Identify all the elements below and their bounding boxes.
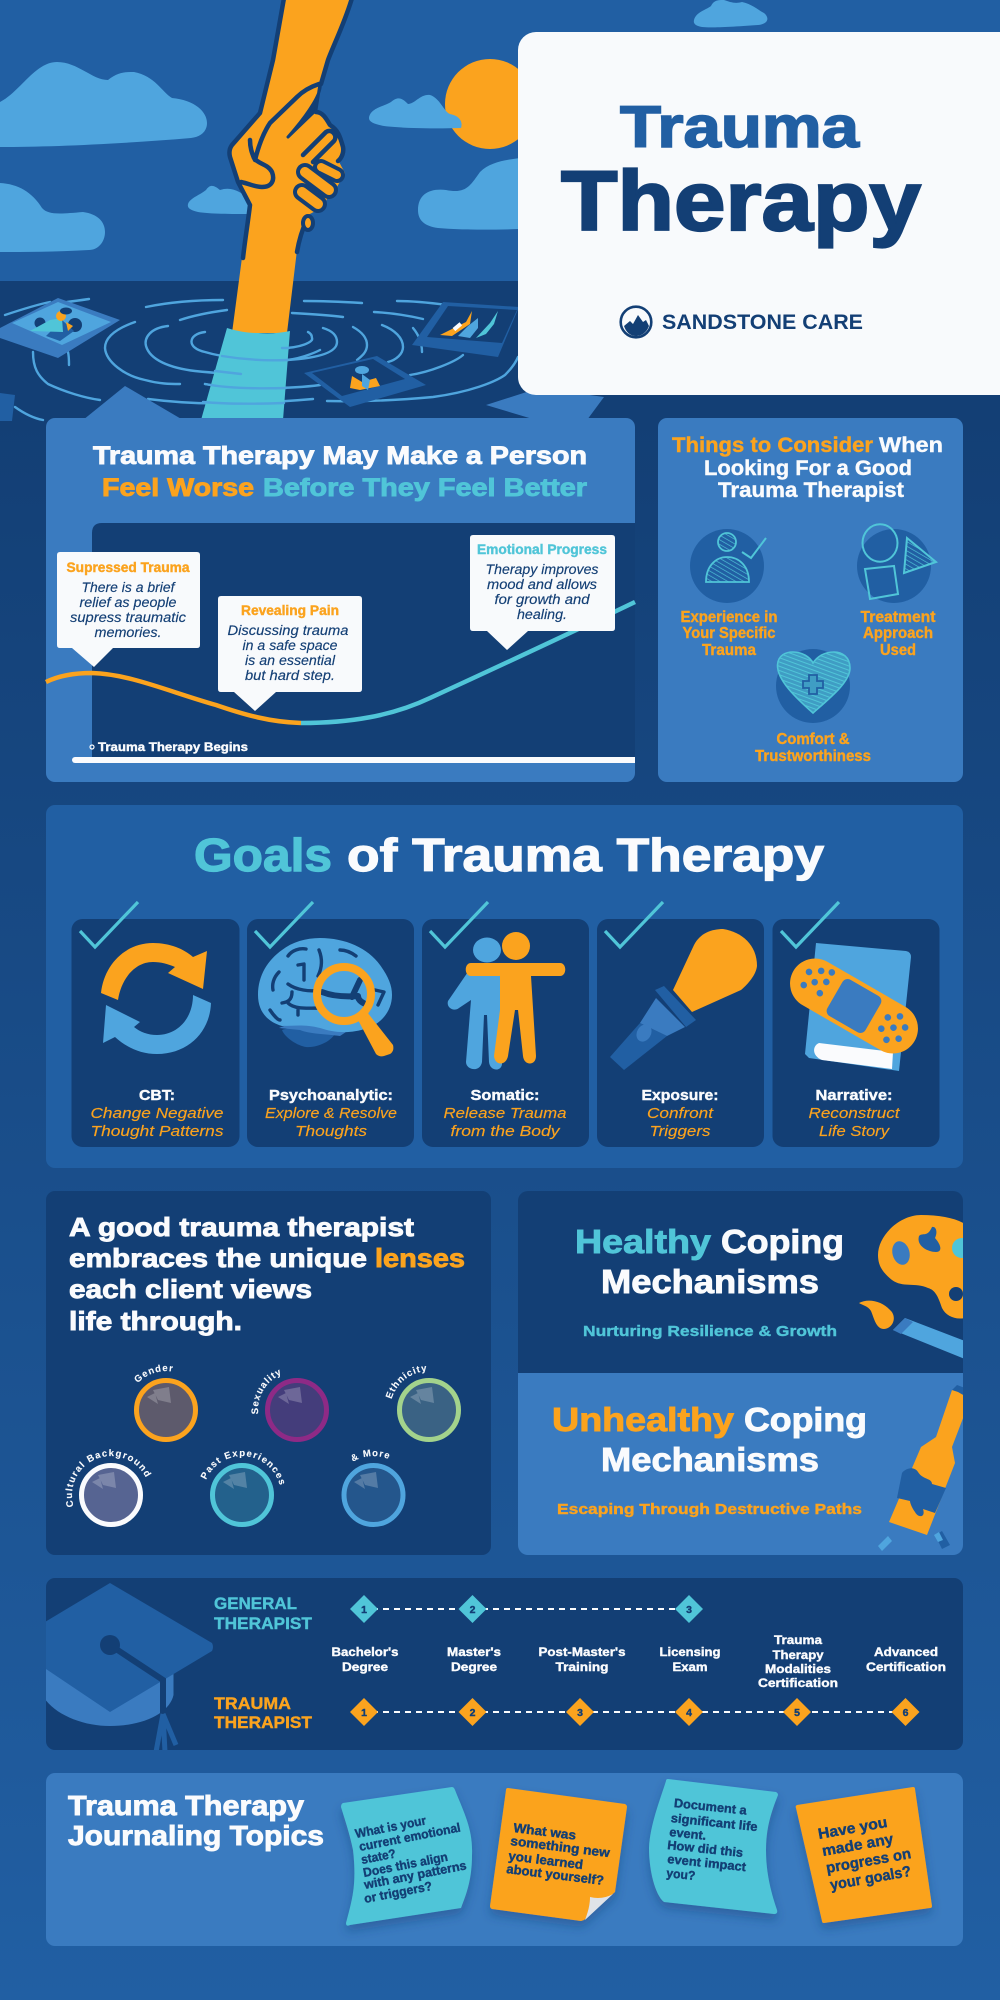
icon: treatment approach [857, 524, 936, 603]
panel: coping mechanisms [518, 1191, 972, 1555]
unhealthy coping: Escaping Through Destructive Paths [557, 1501, 862, 1518]
healthy coping: Healthy [575, 1223, 712, 1260]
note: significant event: significant life [670, 1811, 758, 1834]
general therapist label [214, 1594, 313, 1633]
therapy start label: Trauma Therapy Begins [98, 740, 248, 754]
title card [518, 32, 1000, 395]
lenses statement: lenses [375, 1243, 465, 1273]
callout: revealing pain: Revealing Pain [241, 603, 339, 618]
goal card: psychoanalytic: Thoughts [295, 1123, 368, 1140]
hero illustration [0, 0, 1000, 421]
lenses statement: each client views [69, 1274, 312, 1304]
title: Trauma: Trauma [620, 95, 860, 160]
goal card: somatic: from the Body [450, 1123, 561, 1140]
goal card: CBT [72, 902, 240, 1147]
note: emotional state: or triggers? [363, 1879, 433, 1906]
credential labels: Exam [672, 1660, 708, 1674]
note: emotional state: state? [360, 1847, 397, 1867]
credential labels: Degree [342, 1660, 388, 1674]
icon: comfort heart [776, 649, 850, 723]
general path steps [350, 1595, 703, 1623]
icon: palette and brush [859, 1215, 972, 1359]
note: significant event: you? [666, 1866, 696, 1883]
goal card: somatic: Somatic: [470, 1088, 540, 1104]
unhealthy coping [518, 1373, 965, 1555]
lens: ethnicity [386, 1366, 461, 1442]
lens: past experiences [200, 1450, 284, 1527]
logo: SANDSTONE CARE [662, 311, 863, 334]
unhealthy coping: Mechanisms [601, 1441, 819, 1478]
ripples [5, 299, 518, 420]
label: treatment: Treatment [860, 609, 936, 626]
healthy coping: Mechanisms [601, 1263, 819, 1300]
label: comfort: Trustworthiness [755, 748, 871, 765]
title: Therapy: Therapy [561, 154, 921, 248]
trauma therapist label: TRAUMA [214, 1694, 291, 1713]
callout: revealing pain: but hard step. [245, 668, 335, 683]
label: experience: Trauma [702, 642, 756, 659]
goal card: exposure [597, 902, 764, 1147]
heading [194, 829, 824, 881]
lens: sexuality: Sexuality [251, 1370, 280, 1414]
trauma path steps: 5 [794, 1707, 800, 1719]
healthy coping [518, 1191, 972, 1373]
callout: suppressed trauma [57, 552, 200, 667]
note: significant event: Document a [673, 1796, 748, 1818]
credential labels: Certification [758, 1676, 838, 1690]
heading: Trauma Therapist [718, 479, 904, 502]
panel: things to consider [658, 418, 963, 782]
note: emotional state: with any patterns [362, 1858, 468, 1892]
note: emotional state: Does this align [362, 1850, 449, 1880]
icon: experience [690, 529, 766, 603]
goal card: somatic: Release Trauma [444, 1105, 566, 1122]
lens: past experiences: Past Experiences [200, 1450, 284, 1485]
goal card: exposure: Triggers [650, 1123, 711, 1140]
icon: graduation cap [40, 1583, 213, 1752]
note: progress on goals: Have you [817, 1814, 889, 1843]
note: something new: about yourself? [506, 1861, 605, 1888]
note: progress on goals [796, 1787, 932, 1923]
goal card: somatic [422, 902, 589, 1147]
lenses statement [69, 1212, 465, 1336]
panel: therapist education [40, 1578, 963, 1752]
note: significant event: event impact [667, 1852, 748, 1874]
general path steps: 3 [686, 1604, 692, 1616]
heading [68, 1790, 324, 1851]
label: experience: Your Specific [682, 625, 776, 642]
callout: suppressed trauma: memories. [94, 625, 162, 640]
note: progress on goals: made any [821, 1831, 895, 1860]
label: comfort: Comfort & [776, 731, 850, 748]
heading: Feel Worse [102, 474, 254, 502]
goal card: CBT: Thought Patterns [90, 1123, 224, 1140]
goal card: psychoanalytic: Psychoanalytic: [269, 1088, 393, 1104]
callout: suppressed trauma: There is a brief [82, 580, 176, 595]
lens: gender: Gender [134, 1364, 173, 1382]
trauma path steps: 1 [361, 1707, 367, 1719]
note: emotional state: What is your [354, 1813, 427, 1841]
ripples over sleeve [203, 348, 289, 404]
goal card: narrative: Narrative: [816, 1088, 892, 1104]
credential labels: Training [556, 1660, 608, 1674]
note: something new [490, 1788, 627, 1921]
callout: emotional progress: mood and allows [487, 577, 597, 592]
callout: emotional progress: Emotional Progress [477, 542, 607, 557]
goal card: CBT: CBT: [139, 1088, 175, 1104]
label: experience: Experience in [680, 609, 778, 626]
lenses statement: embraces the unique [69, 1243, 367, 1273]
trauma path steps: 4 [686, 1707, 692, 1719]
heading [672, 434, 943, 502]
note: progress on goals: progress on [825, 1845, 912, 1877]
lenses statement: A good trauma therapist [69, 1212, 414, 1242]
credential labels: Bachelor's [332, 1645, 399, 1659]
credential labels: Certification [866, 1660, 946, 1674]
arm and hand [229, 0, 352, 333]
callout: emotional progress: healing. [517, 607, 567, 622]
note: emotional state [341, 1787, 472, 1926]
note: something new: What was [513, 1820, 577, 1843]
callout: emotional progress: for growth and [494, 592, 590, 607]
callout: revealing pain: is an essential [245, 653, 336, 668]
photo: couple [0, 298, 120, 358]
credential labels: Modalities [765, 1662, 831, 1676]
credential labels [332, 1633, 946, 1690]
label: treatment: Used [880, 642, 916, 659]
credential labels: Licensing [660, 1645, 720, 1659]
note: progress on goals: your goals? [829, 1863, 912, 1894]
callout: suppressed trauma: supress traumatic [70, 610, 186, 625]
heading: Before They Feel Better [263, 474, 587, 502]
trauma path steps: 6 [903, 1707, 909, 1719]
heading [93, 442, 587, 502]
note: emotional state: current emotional [358, 1821, 462, 1854]
callout: revealing pain: in a safe space [242, 638, 338, 653]
goal card: exposure: Exposure: [642, 1088, 718, 1104]
heading: of Trauma Therapy [347, 829, 824, 881]
lens: cultural background: Cultural Background [65, 1449, 152, 1507]
lens: and more [342, 1450, 406, 1527]
curve: decline [46, 673, 301, 723]
lenses statement: life through. [69, 1306, 242, 1336]
timeline baseline [72, 757, 635, 763]
goal card: CBT: Change Negative [90, 1105, 224, 1122]
callout: suppressed trauma: Supressed Trauma [66, 560, 190, 575]
floating shapes [0, 386, 604, 421]
trauma therapist label [214, 1694, 313, 1732]
callout: revealing pain [218, 596, 362, 711]
callout: emotional progress [470, 535, 615, 650]
healthy coping: Coping [721, 1223, 844, 1260]
photo: person [304, 356, 426, 407]
general path steps: 1 [361, 1604, 367, 1616]
note: significant event: event. [669, 1825, 707, 1843]
callout: suppressed trauma: relief as people [80, 595, 176, 610]
credential labels: Trauma [774, 1633, 822, 1647]
credential labels: Master's [447, 1645, 501, 1659]
note: significant event: How did this [667, 1838, 744, 1860]
heading: Looking For a Good [704, 457, 912, 480]
sun [445, 59, 535, 149]
label: treatment [860, 609, 936, 659]
credential labels: Degree [451, 1660, 497, 1674]
photo: bottles [412, 302, 519, 357]
heading: Journaling Topics [68, 1820, 324, 1851]
heading: Goals [194, 829, 332, 881]
goal card: psychoanalytic [247, 902, 414, 1147]
unhealthy coping: Unhealthy [552, 1401, 735, 1438]
panel: goals [46, 805, 963, 1168]
label: experience [680, 609, 778, 659]
lens: ethnicity: Ethnicity [386, 1366, 426, 1399]
credential labels: Post-Master's [538, 1645, 626, 1659]
goal card: narrative: Reconstruct [808, 1105, 900, 1122]
note: something new: something new [510, 1833, 612, 1860]
lens: gender [134, 1364, 198, 1442]
goal card: exposure: Confront [647, 1105, 714, 1122]
lens: and more: & More [352, 1450, 390, 1461]
unhealthy coping: Coping [744, 1401, 867, 1438]
credential labels: Advanced [874, 1645, 938, 1659]
goal card: narrative [772, 902, 940, 1147]
general therapist label: THERAPIST [214, 1614, 313, 1633]
logo [621, 307, 863, 337]
healthy coping: Nurturing Resilience & Growth [583, 1323, 837, 1340]
lens: sexuality [251, 1370, 329, 1442]
sleeve [201, 328, 290, 420]
label: treatment: Approach [863, 625, 933, 642]
label: comfort [755, 731, 871, 765]
note: significant event [649, 1779, 778, 1914]
trauma path steps: 3 [577, 1707, 583, 1719]
clouds [0, 0, 767, 252]
icon: bottle [874, 1385, 965, 1551]
callout: revealing pain: Discussing trauma [228, 623, 349, 638]
heading: Trauma Therapy [68, 1790, 305, 1821]
panel: lenses [46, 1191, 491, 1555]
general therapist label: GENERAL [214, 1594, 297, 1613]
trauma path steps [350, 1698, 920, 1726]
credential labels: Therapy [772, 1648, 824, 1662]
trauma path steps: 2 [470, 1707, 476, 1719]
general path steps: 2 [470, 1604, 476, 1616]
panel: worse before better [46, 418, 635, 782]
page background [0, 420, 1000, 2000]
curve: progress [301, 602, 635, 723]
callout: emotional progress: Therapy improves [486, 562, 599, 577]
trauma therapist label: THERAPIST [214, 1713, 313, 1732]
goal card: psychoanalytic: Explore & Resolve [265, 1105, 397, 1122]
heading: Trauma Therapy May Make a Person [93, 442, 587, 470]
goal card: narrative: Life Story [819, 1123, 891, 1140]
panel: journaling topics [46, 1773, 963, 1946]
heading: Things to Consider [672, 434, 873, 457]
chart area [92, 523, 635, 760]
heading: When [879, 434, 943, 457]
note: something new: you learned [508, 1848, 584, 1872]
